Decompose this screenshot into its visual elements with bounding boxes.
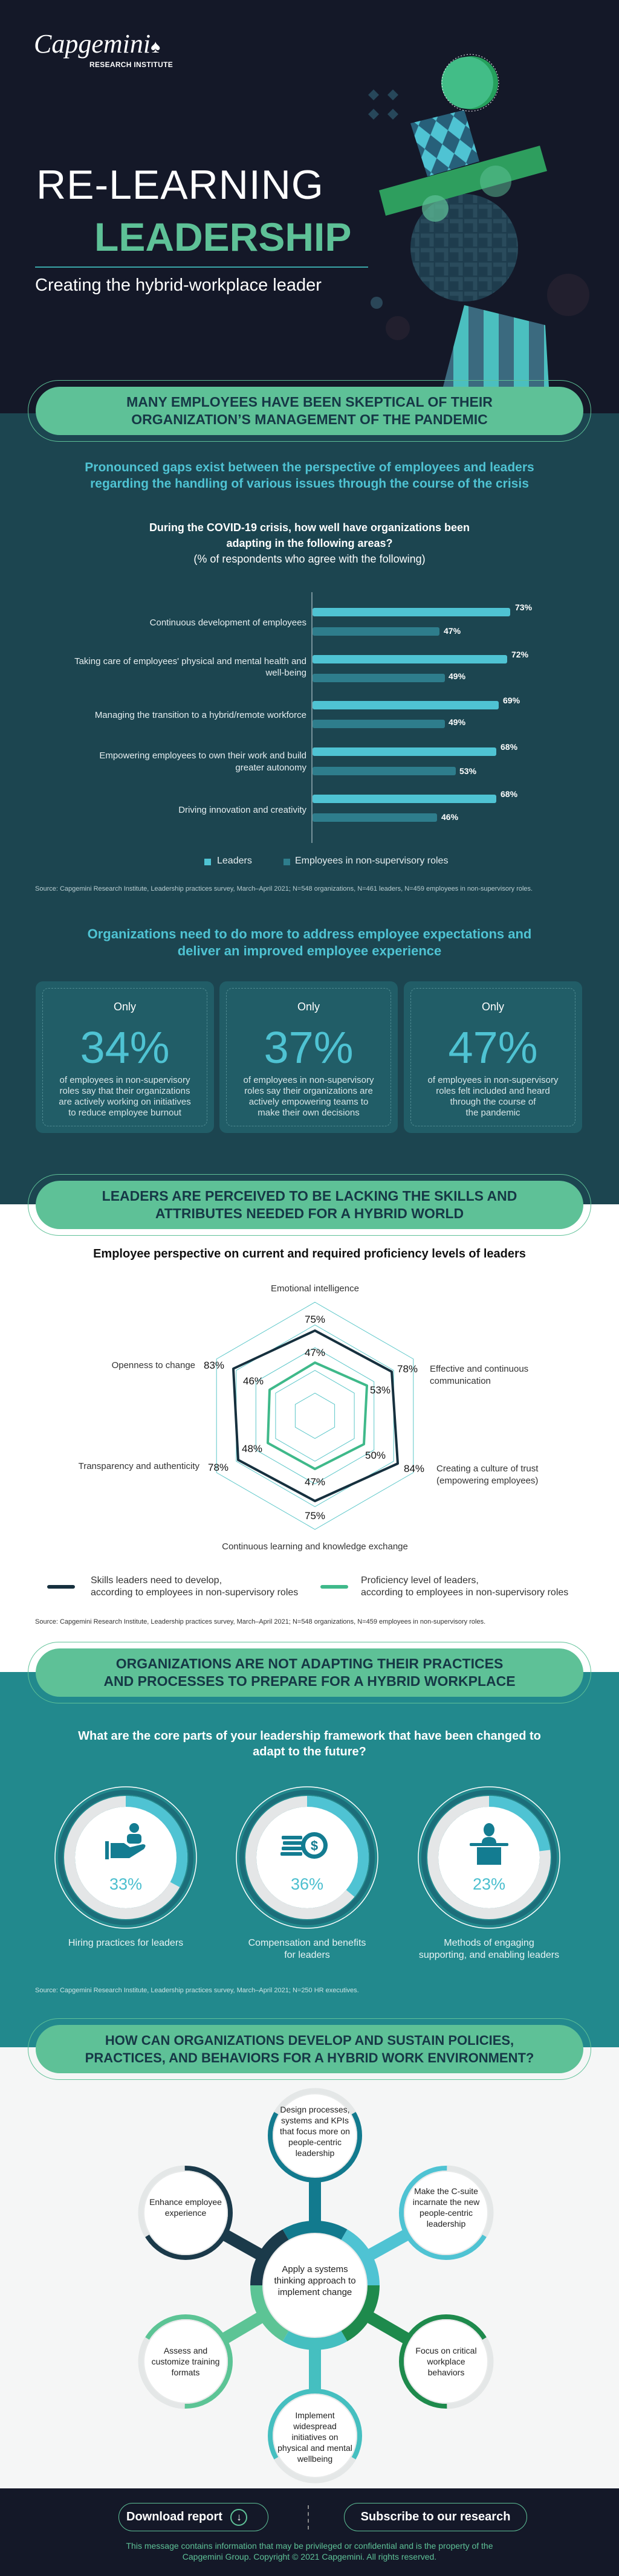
banner: section 1 heading: ORGANIZATION’S MANAGEMENT OF THE PANDEMIC [131, 412, 488, 427]
bar chart: Continuous development of employees [150, 618, 306, 628]
radar legend: Skills leaders need to develop, [91, 1575, 222, 1586]
radar chart: 75% [305, 1314, 325, 1325]
satellite: training formats: Assess and customize training formats [152, 2346, 219, 2377]
radar chart: Openness to change [112, 1360, 195, 1370]
radar legend: Proficiency level of leaders, [361, 1575, 479, 1586]
subtitle: organizations need to do more [88, 926, 531, 958]
donut question [78, 1729, 541, 1758]
card 37%: Only [297, 1001, 320, 1013]
card 47%: of employees in non-supervisory roles felt included and heard through the course of [428, 1075, 558, 1107]
icon: hand with person [105, 1823, 146, 1859]
title: RE-LEARNING [36, 162, 324, 208]
bar chart: 49% [449, 671, 466, 681]
card 34%: of employees in non-supervisory roles say that their organizations are actively working on initiatives to reduce employee burnout [59, 1075, 191, 1118]
source 1: Source: Capgemini Research Institute, Leadership practices survey, March–April 2021; N=548 organizations, N=461 leaders, N=459 employees in non-supervisory roles. [35, 885, 533, 893]
radar chart: 46% [243, 1375, 264, 1387]
footer disclaimer: Capgemini Group. Copyright © 2021 Capgemini. All rights reserved. [183, 2552, 436, 2561]
satellite: employee experience: Enhance employee experience [149, 2197, 222, 2218]
satellite: critical behaviors: Focus on critical workplace behaviors [415, 2346, 477, 2377]
chart question: (% of respondents who agree with the following) [193, 553, 426, 565]
subtitle: pronounced gaps: regarding the handling of various issues through the course of the crisis [90, 477, 529, 491]
bar chart legend [204, 856, 448, 866]
text: Methods of engaging [444, 1938, 534, 1948]
bar chart: greater autonomy [235, 763, 306, 773]
radar chart: Transparency and authenticity [79, 1461, 199, 1471]
radar chart: Continuous learning and knowledge exchange [222, 1541, 408, 1552]
radar chart: 53% [370, 1384, 391, 1396]
source 3: Source: Capgemini Research Institute, Leadership practices survey, March–April 2021; N=250 HR executives. [35, 1987, 359, 1994]
title: LEADERSHIP [94, 215, 351, 259]
radar chart title: Employee perspective on current and required proficiency levels of leaders [93, 1247, 526, 1261]
banner: section 3 heading: AND PROCESSES TO PREPARE FOR A HYBRID WORKPLACE [103, 1673, 516, 1689]
icon: speaker at podium [470, 1823, 508, 1865]
radar chart: 47% [305, 1476, 325, 1488]
donut charts: 33% [109, 1875, 142, 1893]
chart question: adapting in the following areas? [226, 537, 393, 549]
illustration: stacked shapes [368, 54, 589, 387]
card 37% [219, 981, 398, 1133]
card 34%: Only [114, 1001, 136, 1013]
banner: section 4 heading: PRACTICES, AND BEHAVIORS FOR A HYBRID WORK ENVIRONMENT? [85, 2050, 534, 2065]
icon: coins and dollar: $ [311, 1838, 318, 1853]
radar chart: 83% [204, 1360, 224, 1371]
donut charts: 23% [473, 1875, 505, 1893]
title [35, 162, 368, 295]
satellite: C-suite: Make the C-suite incarnate the new people-centric leadership [413, 2186, 479, 2229]
bar chart: 68% [501, 742, 518, 752]
title: Creating the hybrid-workplace leader [35, 276, 322, 295]
bar chart: Managing the transition to a hybrid/remote workforce [95, 710, 306, 720]
banner: section 3 heading: ORGANIZATIONS ARE NOT ADAPTING THEIR PRACTICES [116, 1656, 503, 1671]
radar chart: 50% [365, 1450, 386, 1461]
footer disclaimer: This message contains information that may be privileged or confidential and is the property of the [126, 2541, 493, 2551]
banner: section 2 heading [28, 1174, 591, 1236]
network diagram [138, 2088, 493, 2484]
section 1 background [0, 413, 619, 1204]
satellite: wellbeing: Implement widespread initiatives on physical and mental wellbeing [277, 2410, 352, 2464]
bar chart legend: Employees in non-supervisory roles [295, 856, 448, 866]
banner: section 2 heading: ATTRIBUTES NEEDED FOR A HYBRID WORLD [155, 1206, 464, 1221]
card 47%: Only [482, 1001, 504, 1013]
bar chart: Empowering employees to own their work and build [99, 751, 306, 761]
banner: section 2 heading: LEADERS ARE PERCEIVED TO BE LACKING THE SKILLS AND [102, 1188, 517, 1204]
subtitle: organizations need to do more: deliver an improved employee experience [178, 943, 441, 958]
chart question: During the COVID-19 crisis, how well have organizations been [149, 521, 470, 534]
logo: RESEARCH INSTITUTE [89, 60, 173, 69]
chart question [149, 521, 470, 565]
footer buttons [118, 2503, 527, 2531]
bar chart: Taking care of employees' physical and mental health and [74, 656, 306, 667]
text: Compensation and benefits [248, 1938, 366, 1948]
bar chart [74, 592, 533, 843]
network hub text: Apply a systems thinking approach to implement change [274, 2264, 356, 2297]
satellite: design processes: Design processes, systems and KPIs that focus more on people-centric leadership [280, 2105, 350, 2158]
bar chart: well-being [265, 668, 306, 678]
donut labels: Hiring practices for leaders [68, 1938, 183, 1948]
bar chart legend: Leaders [217, 856, 252, 866]
card 47%: 47% [448, 1022, 538, 1073]
radar chart: 78% [208, 1462, 228, 1473]
bar chart: Driving innovation and creativity [178, 805, 306, 815]
footer buttons: Download report [126, 2510, 222, 2523]
radar chart: communication [430, 1376, 491, 1386]
radar chart [79, 1283, 539, 1552]
radar chart: 48% [242, 1443, 262, 1454]
banner: section 3 heading [28, 1642, 591, 1703]
icon: coins and dollar [280, 1832, 328, 1859]
card 37%: of employees in non-supervisory roles say their organizations are actively empowering teams to make their own decisions [244, 1075, 374, 1118]
card 47% [404, 981, 582, 1133]
bar chart: 53% [459, 766, 477, 776]
footer buttons: ↓ [236, 2511, 242, 2523]
section 2 background [0, 1204, 619, 1672]
bar chart: 68% [501, 789, 518, 799]
section 3 background [0, 1672, 619, 2047]
banner: section 4 heading: HOW CAN ORGANIZATIONS DEVELOP AND SUSTAIN POLICIES, [105, 2033, 514, 2048]
bar chart: 72% [511, 650, 529, 659]
subtitle: pronounced gaps [85, 460, 534, 491]
banner: section 1 heading [28, 380, 591, 442]
donut question: adapt to the future? [253, 1745, 366, 1758]
radar legend [47, 1575, 568, 1598]
bar chart: 69% [503, 696, 520, 705]
footer disclaimer [126, 2541, 493, 2561]
donut charts [54, 1786, 560, 1929]
radar chart: 47% [305, 1347, 325, 1358]
card 37%: 37% [264, 1022, 354, 1073]
donut question: What are the core parts of your leadership framework that have been changed to [78, 1729, 541, 1743]
source 2: Source: Capgemini Research Institute, Leadership practices survey, March–April 2021; N=548 organizations, N=459 employees in non-supervisory roles. [35, 1618, 485, 1625]
logo: Capgemini♠ [34, 29, 160, 59]
radar legend: according to employees in non-supervisory roles [91, 1587, 298, 1598]
logo [34, 29, 173, 69]
radar chart: Creating a culture of trust [436, 1464, 539, 1474]
subtitle: organizations need to do more: Organizations need to do more to address employee expectations and [88, 926, 531, 941]
radar chart: (empowering employees) [436, 1476, 538, 1486]
donut charts: 36% [291, 1875, 323, 1893]
radar chart: Emotional intelligence [271, 1283, 359, 1294]
radar chart: 84% [404, 1463, 424, 1474]
bar chart: 73% [515, 602, 533, 612]
card 34% [36, 981, 214, 1133]
banner: section 1 heading: MANY EMPLOYEES HAVE BEEN SKEPTICAL OF THEIR [126, 394, 493, 410]
card 34%: 34% [80, 1022, 170, 1073]
footer buttons: Subscribe to our research [361, 2510, 510, 2523]
radar legend: according to employees in non-supervisory roles [361, 1587, 568, 1598]
radar chart: Effective and continuous [430, 1364, 528, 1374]
bar chart: 49% [449, 717, 466, 727]
subtitle: pronounced gaps: Pronounced gaps exist between the perspective of employees and leaders [85, 460, 534, 474]
radar chart: 78% [397, 1363, 418, 1375]
text: supporting, and enabling leaders [419, 1950, 559, 1960]
bar chart: 47% [444, 626, 461, 636]
header background [0, 0, 619, 413]
radar chart: 75% [305, 1510, 325, 1522]
bar chart: 46% [441, 812, 459, 822]
card 47%: the pandemic [465, 1108, 520, 1118]
text: for leaders [284, 1950, 330, 1960]
banner: section 4 heading [28, 2018, 591, 2080]
footer background [0, 2488, 619, 2576]
